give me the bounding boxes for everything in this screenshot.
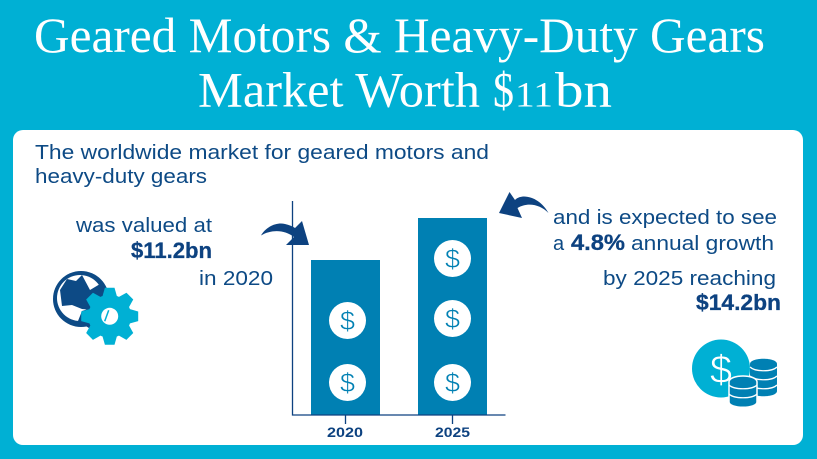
- title: 11: [515, 74, 553, 114]
- icon: money and coin stacks: [692, 340, 777, 407]
- title: [34, 7, 765, 118]
- arrow: to 2025 bar: [499, 192, 548, 218]
- text: 2020 value: was valued at: [75, 215, 212, 237]
- axis labels: 2020: [327, 424, 363, 440]
- text: growth: a: [553, 233, 565, 255]
- icon: money and coin stacks: $: [710, 348, 732, 392]
- intro text: The worldwide market for geared motors and: [35, 142, 489, 164]
- title: Market Worth: [198, 62, 480, 118]
- panel: content: [13, 130, 803, 445]
- title: Geared Motors & Heavy-Duty Gears: [34, 7, 765, 63]
- text: growth: $14.2bn: [696, 290, 781, 315]
- title: $: [493, 62, 514, 118]
- icon: globe and gear: [53, 271, 138, 345]
- intro text: [35, 142, 489, 188]
- text: growth: [553, 207, 781, 315]
- bar: 2020: [311, 260, 380, 415]
- icon: rear coin stack: [750, 359, 777, 396]
- icon: front coin stack: [729, 376, 757, 407]
- axis labels: 2025: [435, 424, 470, 440]
- coins: 2025 bar: $: [445, 304, 460, 334]
- chart: bar chart: [292, 201, 506, 440]
- icon: globe: [53, 271, 109, 330]
- text: 2020 value: in 2020: [199, 268, 273, 290]
- axes: [292, 201, 506, 424]
- intro text: heavy-duty gears: [35, 166, 207, 188]
- axis labels: [327, 424, 470, 440]
- icon: gear: [81, 288, 138, 345]
- coins: 2020 bar: $: [340, 368, 355, 398]
- coins: 2025 bar: $: [445, 368, 460, 398]
- text: 2020 value: $11.2bn: [131, 238, 212, 263]
- bar: 2025: [418, 218, 487, 415]
- coins: 2025 bar: [434, 240, 471, 401]
- text: growth: and is expected to see: [553, 207, 777, 229]
- coins: 2020 bar: $: [340, 306, 355, 336]
- text: growth: annual growth: [631, 233, 774, 255]
- title: bn: [555, 62, 612, 118]
- arrow: to 2020 bar: [261, 221, 309, 245]
- coins: 2025 bar: $: [445, 244, 460, 274]
- coins: 2020 bar: [329, 302, 366, 401]
- text: growth: by 2025 reaching: [603, 268, 776, 290]
- text: growth: 4.8%: [571, 230, 625, 255]
- text: 2020 value: [75, 215, 273, 290]
